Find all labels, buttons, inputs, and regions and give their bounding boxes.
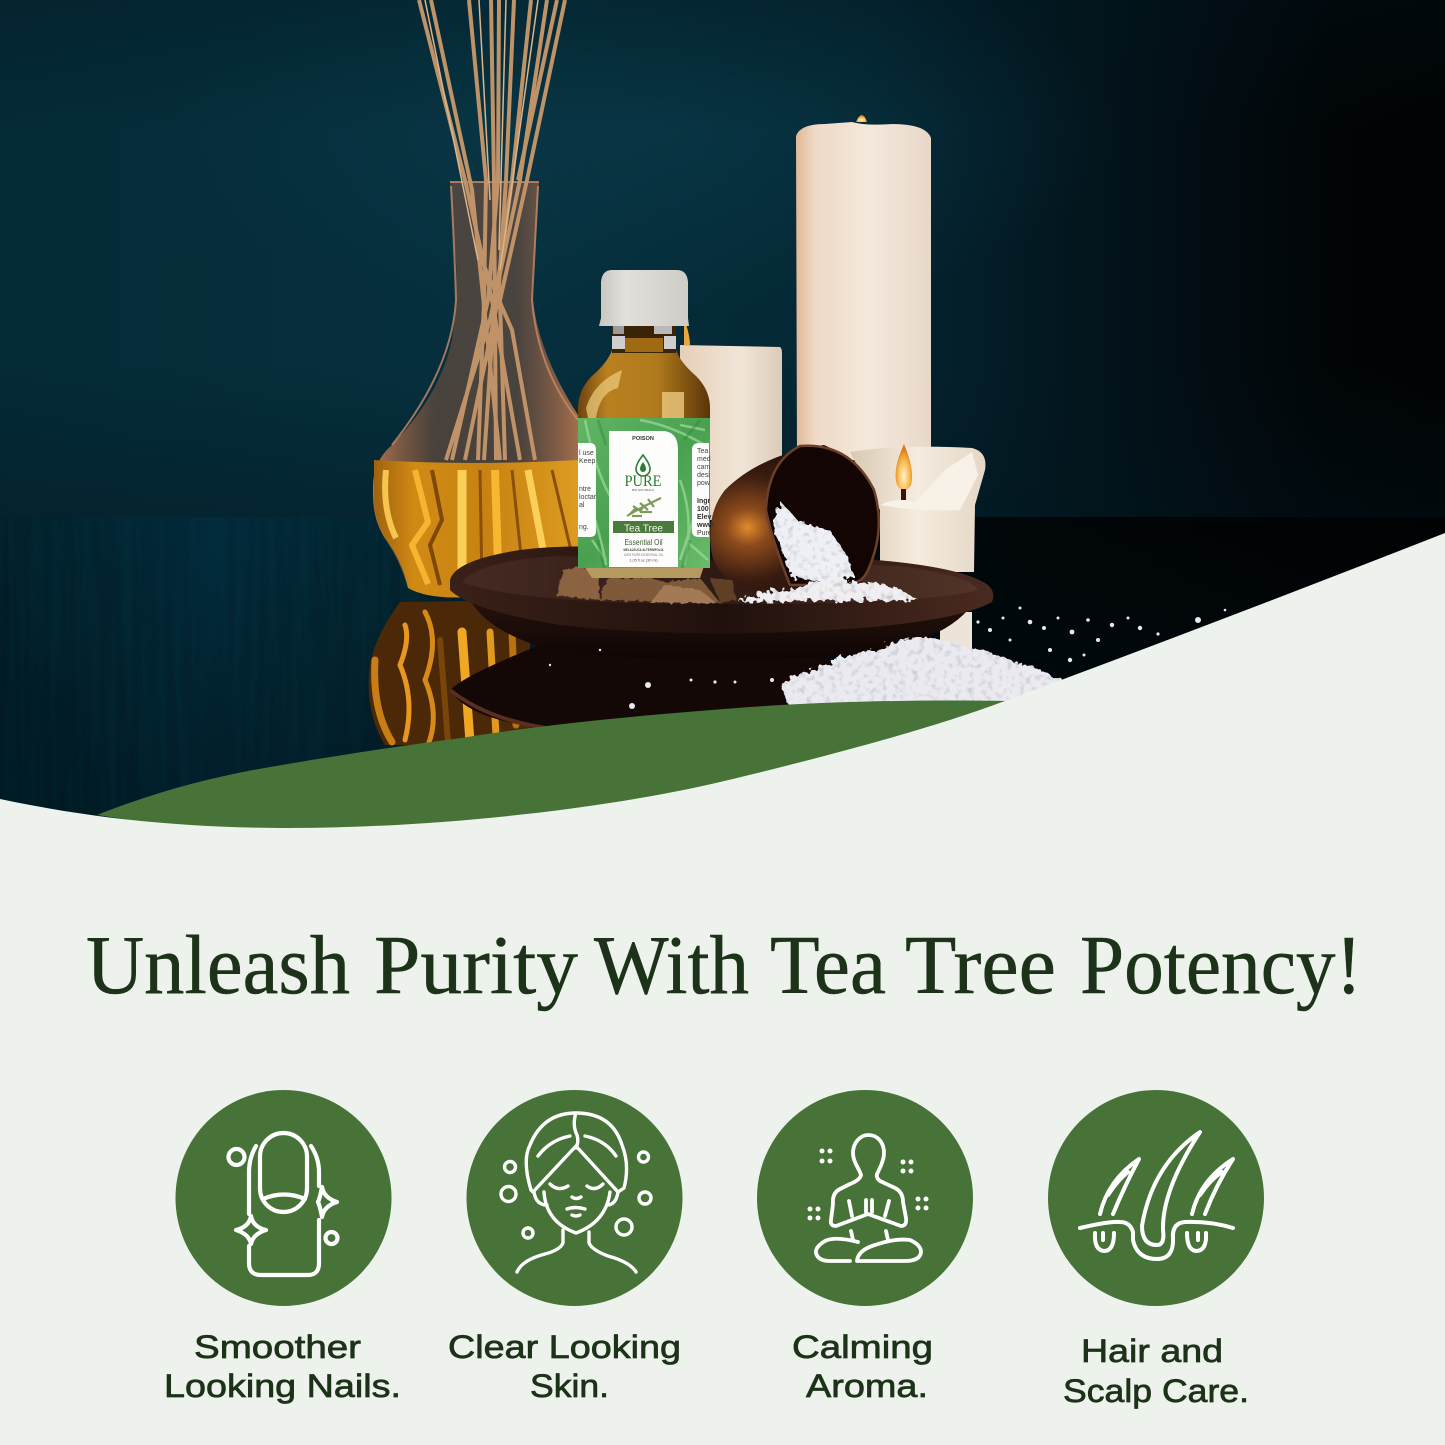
label: Scalp Care. bbox=[1063, 1373, 1249, 1409]
backdrop wall bbox=[0, 0, 1445, 517]
label bbox=[448, 1329, 681, 1404]
label: Calming bbox=[792, 1329, 933, 1365]
right side panel: 100 bbox=[697, 506, 709, 513]
reflection: candle bbox=[940, 612, 972, 652]
amber glass body bbox=[578, 350, 710, 420]
circle badge bbox=[757, 1090, 973, 1306]
left side panel: l use bbox=[579, 450, 594, 457]
white cap bbox=[599, 270, 689, 326]
salt in bowl bbox=[772, 503, 854, 584]
reflection: plate bbox=[450, 645, 860, 730]
reeds bbox=[419, 0, 565, 460]
title: With bbox=[594, 919, 749, 1012]
label bbox=[1063, 1333, 1249, 1409]
candle flame bbox=[896, 444, 912, 490]
pale curved panel bbox=[0, 533, 1445, 1445]
oil bbox=[374, 460, 578, 598]
spilled salt pile bbox=[782, 638, 1068, 712]
neck bbox=[612, 325, 676, 353]
label text: POISON: POISON bbox=[632, 436, 654, 442]
essential oil label: Essential Oil bbox=[624, 538, 663, 547]
left side panel: loctar bbox=[579, 494, 597, 501]
green label bbox=[578, 418, 714, 568]
scattered salt crystals bbox=[549, 606, 1226, 709]
icon: meditating figure bbox=[816, 1135, 921, 1261]
title: Tea bbox=[770, 919, 886, 1012]
left side panel: al bbox=[579, 502, 585, 509]
essential oil bottle bbox=[578, 270, 714, 578]
label bbox=[792, 1329, 933, 1404]
right side panel: www bbox=[696, 522, 714, 529]
circle badge bbox=[1048, 1090, 1264, 1306]
purity line: 100% PURE ESSENTIAL OIL bbox=[624, 553, 664, 557]
icon: face with towel bbox=[501, 1113, 651, 1272]
tea tree sprig bbox=[627, 498, 661, 516]
brown sugar cubes bbox=[556, 566, 736, 603]
title: Unleash bbox=[86, 919, 350, 1012]
right side panel: desi bbox=[697, 472, 710, 479]
right side panel: Elev bbox=[697, 514, 712, 521]
circle badge bbox=[466, 1090, 682, 1306]
right side panel: Pure bbox=[697, 530, 712, 537]
title: Purity bbox=[374, 919, 578, 1012]
label bbox=[164, 1329, 401, 1404]
green name band bbox=[613, 521, 674, 533]
right side panel: pow bbox=[697, 480, 711, 487]
volume: 1.05 fl oz (30 ml) bbox=[629, 558, 658, 562]
benefit: aroma bbox=[757, 1090, 973, 1404]
right side panel bbox=[692, 443, 714, 537]
title: Tree bbox=[905, 919, 1056, 1012]
centre white panel bbox=[609, 431, 678, 567]
photo: spa still life bbox=[0, 0, 1445, 837]
left side panel bbox=[578, 443, 597, 537]
right side panel: cam bbox=[697, 464, 710, 471]
copper bowl bbox=[710, 445, 880, 595]
label: Looking Nails. bbox=[164, 1368, 401, 1404]
icon: nail bbox=[228, 1133, 338, 1275]
glass body bbox=[373, 182, 578, 598]
benefit: nails bbox=[164, 1090, 401, 1404]
left side panel: ng. bbox=[579, 524, 589, 531]
label: Aroma. bbox=[806, 1368, 928, 1404]
medium candle bbox=[680, 318, 782, 520]
bottle base glass bbox=[584, 566, 704, 578]
circle badge bbox=[176, 1090, 392, 1306]
neck rim highlights bbox=[392, 182, 578, 445]
green wave accent bbox=[97, 700, 1010, 860]
icon: hair follicles bbox=[1080, 1132, 1233, 1259]
benefit: hair and scalp bbox=[1048, 1090, 1264, 1409]
drop logo bbox=[636, 455, 650, 476]
label: Skin. bbox=[530, 1368, 609, 1404]
title bbox=[86, 919, 1362, 1012]
small candle bbox=[850, 444, 985, 572]
label: Hair and bbox=[1081, 1333, 1223, 1369]
sparkle dots bbox=[808, 1148, 928, 1220]
benefit: skin bbox=[448, 1090, 682, 1404]
reflection: vase bbox=[369, 600, 530, 745]
right side panel: med bbox=[697, 456, 711, 463]
salt on plate bbox=[738, 581, 918, 602]
right side panel: Ingr bbox=[697, 498, 710, 505]
tall candle bbox=[796, 115, 931, 460]
latin name: MELALEUCA ALTERNIFOLIA bbox=[624, 548, 664, 552]
brand name: PURE bbox=[624, 473, 662, 490]
reeds diffuser vase bbox=[373, 0, 578, 598]
product name: Tea Tree bbox=[624, 524, 663, 534]
bowl rim opening bbox=[766, 446, 879, 585]
brand subtitle: BIO NATURALS bbox=[632, 488, 654, 492]
reflective table bbox=[0, 517, 1445, 837]
label: Clear Looking bbox=[448, 1329, 681, 1365]
left side panel: ntre bbox=[579, 486, 591, 493]
title: Potency! bbox=[1080, 919, 1362, 1012]
wooden plate bbox=[450, 546, 993, 660]
label: Smoother bbox=[194, 1329, 361, 1365]
right side panel: Tea bbox=[697, 448, 708, 455]
left side panel: Keep bbox=[579, 458, 595, 465]
